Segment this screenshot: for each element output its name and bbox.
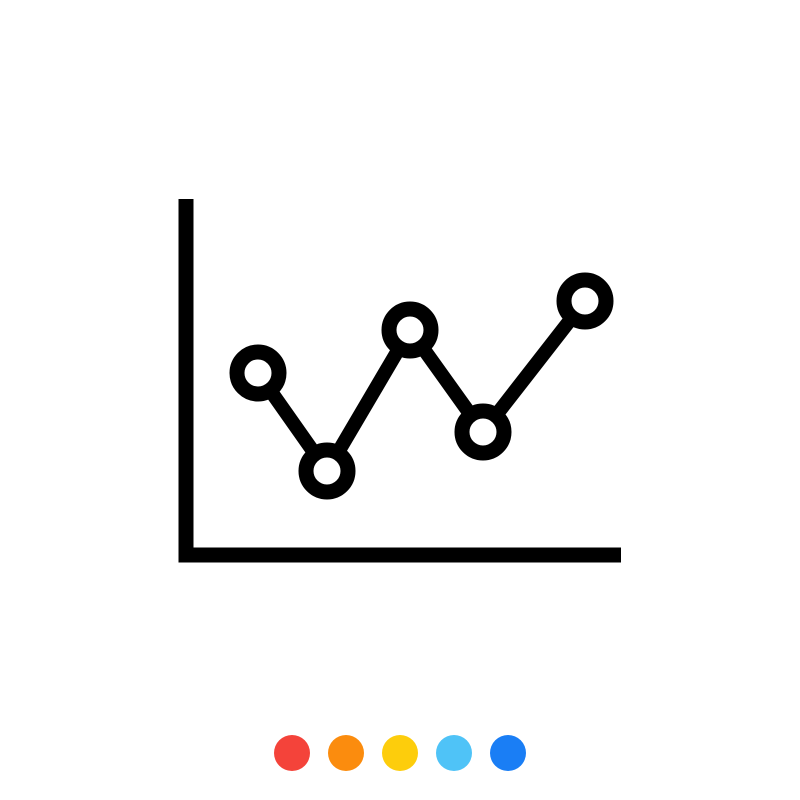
color dots <box>274 735 526 771</box>
axes <box>186 199 621 555</box>
line series <box>237 280 606 492</box>
